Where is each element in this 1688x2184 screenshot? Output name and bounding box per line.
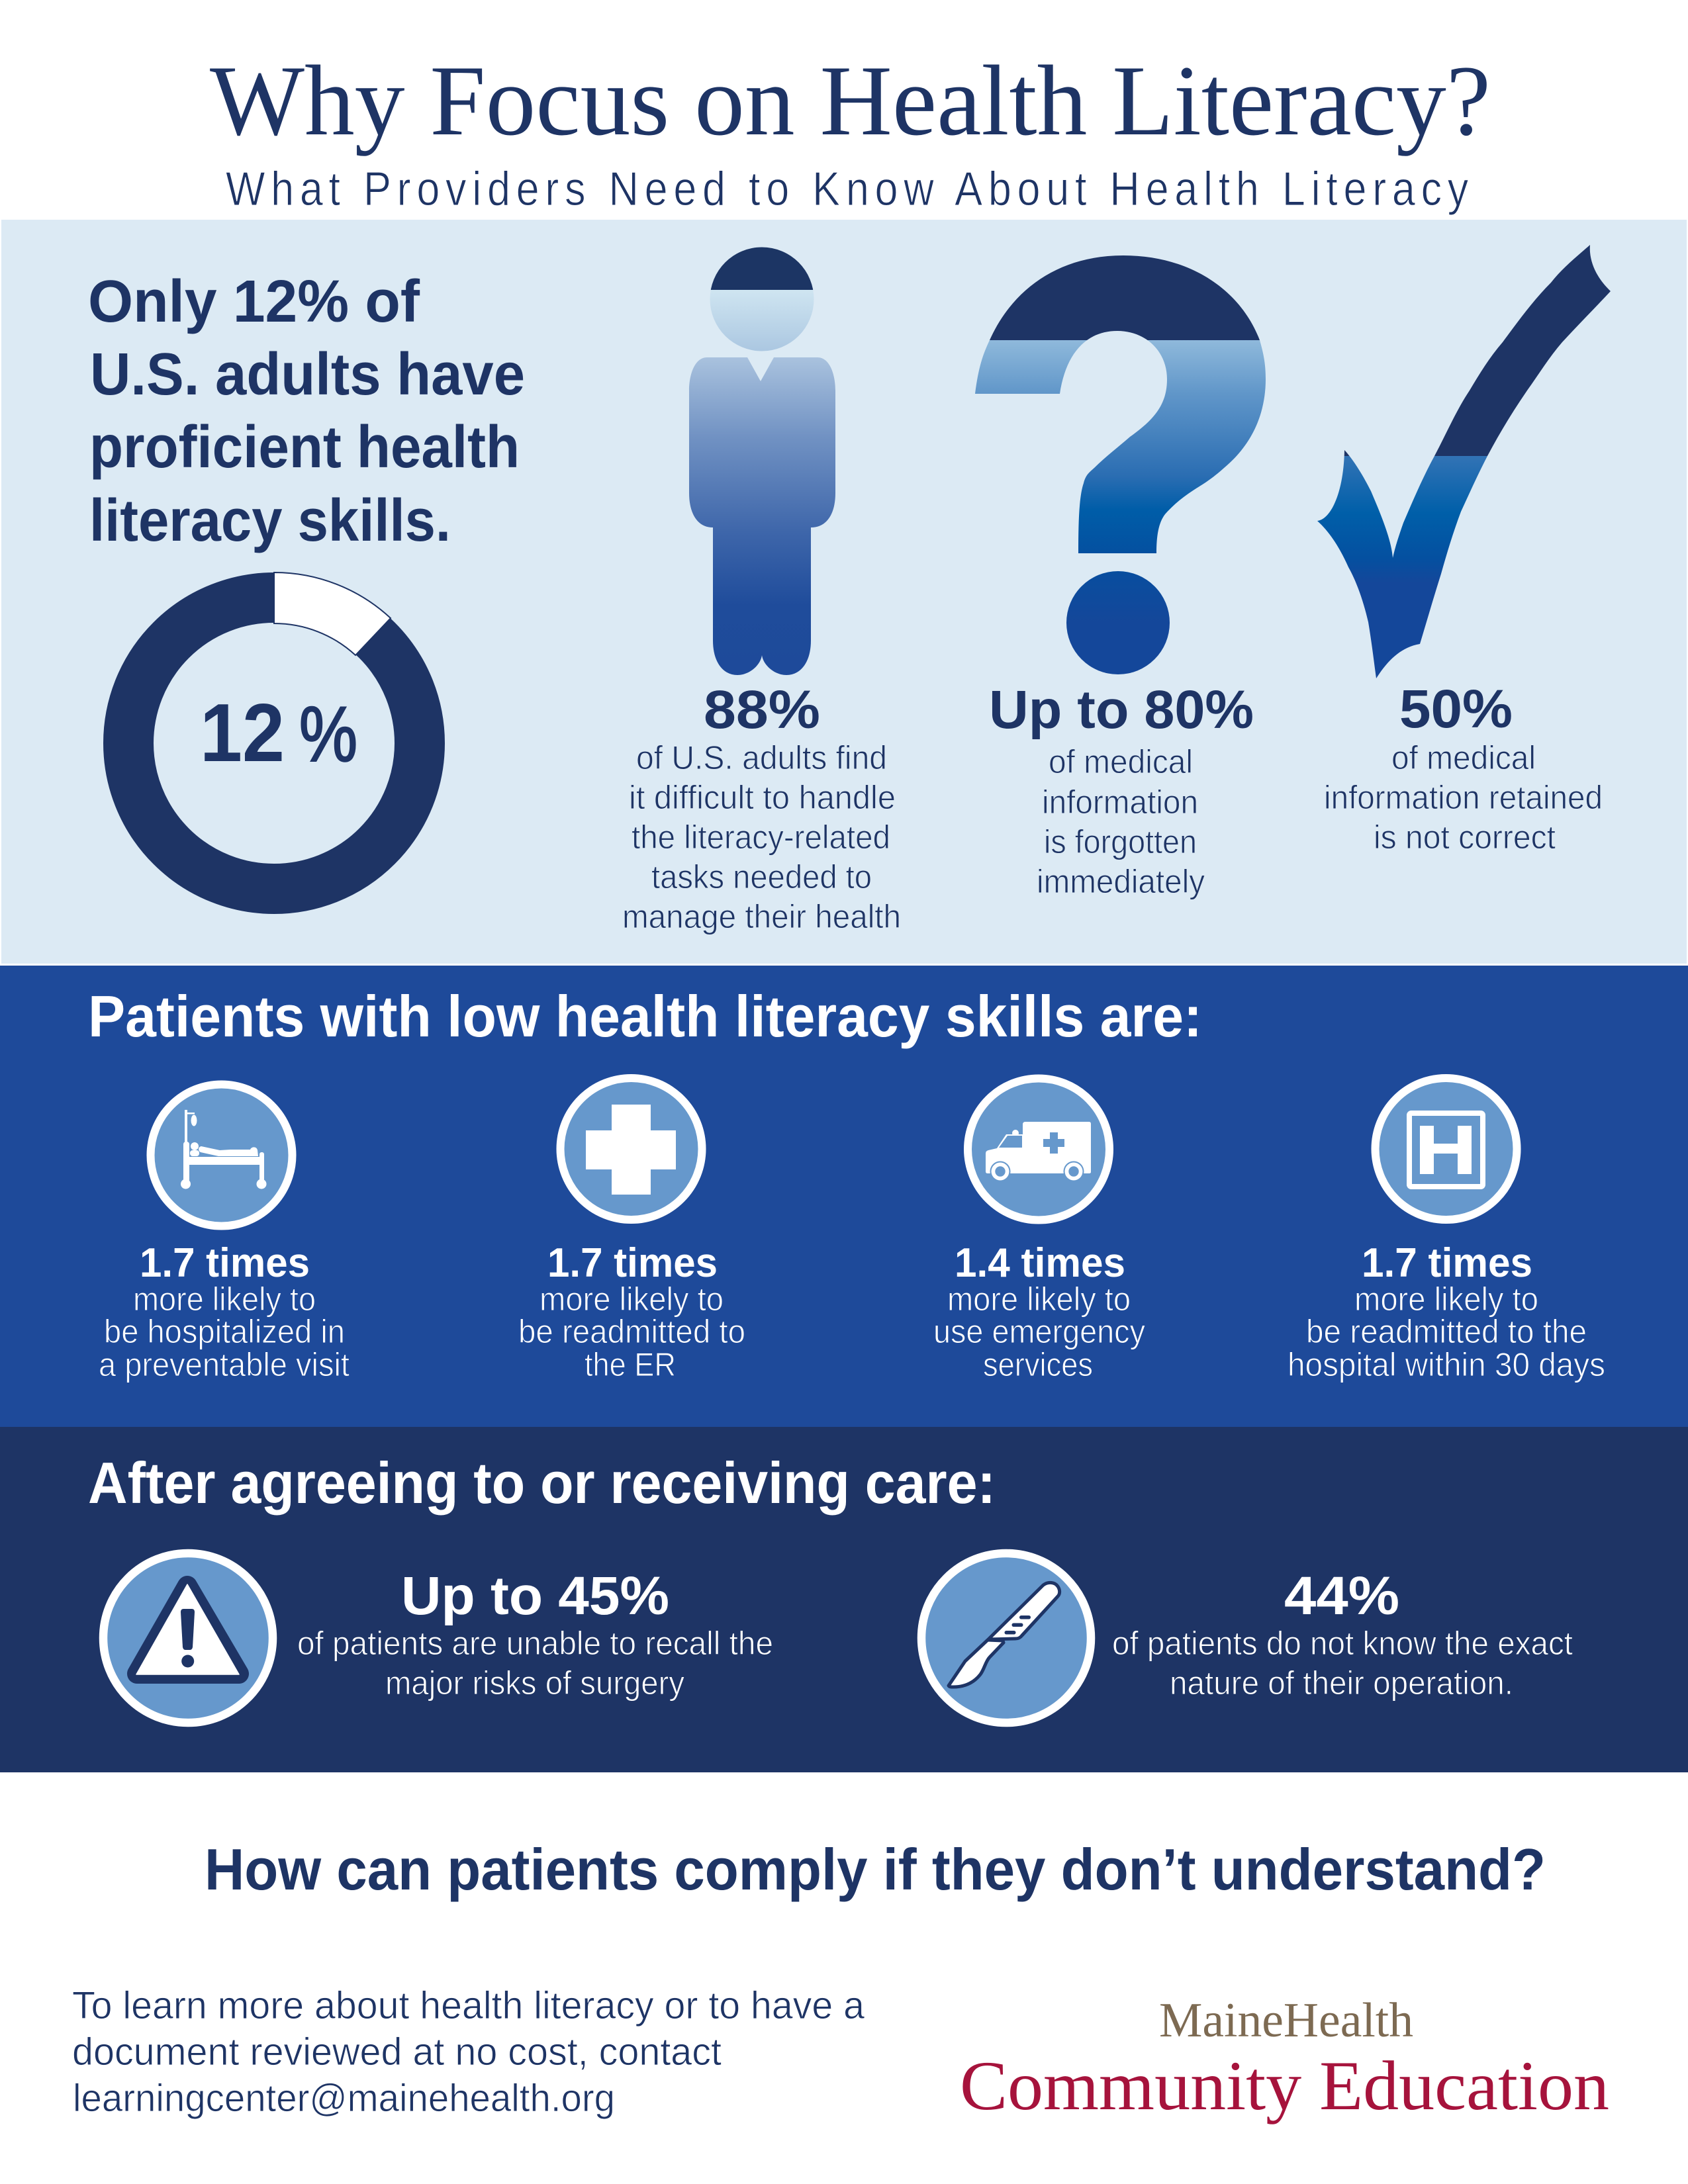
heading: only 12 percent: literacy skills. xyxy=(89,488,451,554)
stat: hospitalized: 1.7 times xyxy=(140,1240,310,1286)
logo xyxy=(960,1993,1609,2124)
stat: readmitted to hospital: more likely to xyxy=(1354,1281,1538,1318)
icon: hospital bed xyxy=(151,1084,293,1226)
stat: 88 percent: manage their health xyxy=(622,898,901,935)
stat: up to 80 percent: of medical xyxy=(1049,743,1193,780)
callout question: How can patients comply if they don’t understand? xyxy=(205,1837,1546,1902)
stat: hospitalized xyxy=(99,1240,350,1383)
contact text: document reviewed at no cost, contact xyxy=(72,2030,722,2073)
stat: hospitalized: be hospitalized in xyxy=(104,1313,345,1350)
panel: patients with low health literacy xyxy=(0,966,1688,1427)
panel: statistics on proficiency xyxy=(1,220,1687,964)
icon: person xyxy=(689,248,835,675)
contact text xyxy=(72,1984,865,2120)
stat: 50 percent: is not correct xyxy=(1374,819,1556,856)
heading: only 12 percent xyxy=(88,269,525,554)
logo: MaineHealth xyxy=(1159,1993,1413,2048)
icon: scalpel xyxy=(921,1553,1091,1723)
stat: 44 percent xyxy=(1112,1566,1573,1702)
stat: 88 percent: tasks needed to xyxy=(651,858,872,895)
stat: hospitalized: a preventable visit xyxy=(99,1346,350,1383)
heading: after agreeing: After agreeing to or receiving care: xyxy=(88,1450,996,1516)
heading: only 12 percent: U.S. adults have xyxy=(90,341,525,408)
stat: readmitted to ER: more likely to xyxy=(539,1281,724,1318)
stat: up to 45 percent: Up to 45% xyxy=(401,1566,669,1626)
logo: Community Education xyxy=(960,2047,1609,2124)
stat: up to 80 percent: immediately xyxy=(1037,863,1205,900)
heading: patients: Patients with low health literacy skills are: xyxy=(88,983,1202,1049)
stat: 88 percent xyxy=(622,680,901,935)
stat: readmitted to ER: 1.7 times xyxy=(547,1240,718,1286)
stat: emergency services xyxy=(933,1240,1145,1383)
heading: only 12 percent: Only 12% of xyxy=(88,269,420,335)
stat: readmitted to hospital: hospital within 30 days xyxy=(1288,1346,1605,1383)
stat: 44 percent: nature of their operation. xyxy=(1170,1664,1513,1702)
stat: up to 45 percent: of patients are unable to recall the xyxy=(297,1625,773,1662)
stat: emergency services: 1.4 times xyxy=(955,1240,1125,1286)
stat: 50 percent xyxy=(1324,679,1603,856)
stat: up to 45 percent: major risks of surgery xyxy=(385,1664,684,1702)
icon: hospital sign xyxy=(1376,1078,1517,1220)
stat: readmitted to ER: be readmitted to xyxy=(518,1313,745,1350)
icon: ambulance xyxy=(968,1079,1109,1220)
stat: readmitted to ER: the ER xyxy=(585,1346,676,1383)
icon: warning triangle xyxy=(103,1553,273,1723)
stat: 50 percent: 50% xyxy=(1399,679,1513,739)
stat: 88 percent: 88% xyxy=(704,680,820,740)
stat: emergency services: use emergency xyxy=(933,1313,1145,1350)
stat: up to 80 percent xyxy=(989,680,1254,900)
panel: after agreeing to or receiving care xyxy=(0,1427,1688,1772)
title: Why Focus on Health Literacy? xyxy=(210,45,1491,156)
donut chart: 12 percent: % xyxy=(299,691,357,778)
stat: 44 percent: of patients do not know the exact xyxy=(1112,1625,1573,1662)
heading: only 12 percent: proficient health xyxy=(89,414,520,480)
stat: readmitted to ER xyxy=(518,1240,745,1383)
stat: readmitted to hospital: 1.7 times xyxy=(1362,1240,1532,1286)
stat: emergency services: services xyxy=(983,1346,1093,1383)
stat: up to 80 percent: information xyxy=(1042,784,1198,821)
stat: up to 80 percent: is forgotten xyxy=(1044,823,1197,860)
stat: 88 percent: it difficult to handle xyxy=(629,779,896,816)
stat: emergency services: more likely to xyxy=(947,1281,1131,1318)
stat: readmitted to hospital xyxy=(1288,1240,1605,1383)
donut chart: 12 percent: 12 xyxy=(200,688,285,779)
stat: hospitalized: more likely to xyxy=(133,1281,316,1318)
stat: readmitted to hospital: be readmitted to the xyxy=(1306,1313,1587,1350)
icon: check mark xyxy=(1317,245,1611,678)
contact text: To learn more about health literacy or to have a xyxy=(72,1984,865,2027)
donut chart: 12 percent xyxy=(128,572,420,889)
stat: 44 percent: 44% xyxy=(1284,1566,1399,1626)
stat: 50 percent: of medical xyxy=(1391,739,1536,776)
stat: 88 percent: of U.S. adults find xyxy=(636,739,887,776)
stat: up to 80 percent: Up to 80% xyxy=(989,680,1254,740)
subtitle: What Providers Need to Know About Health Literacy xyxy=(226,163,1474,216)
stat: 50 percent: information retained xyxy=(1324,779,1603,816)
stat: 88 percent: the literacy-related xyxy=(632,819,890,856)
icon: question mark xyxy=(975,255,1266,674)
icon: medical cross xyxy=(560,1078,702,1220)
contact text: learningcenter@mainehealth.org xyxy=(73,2077,615,2120)
stat: up to 45 percent xyxy=(297,1566,773,1702)
